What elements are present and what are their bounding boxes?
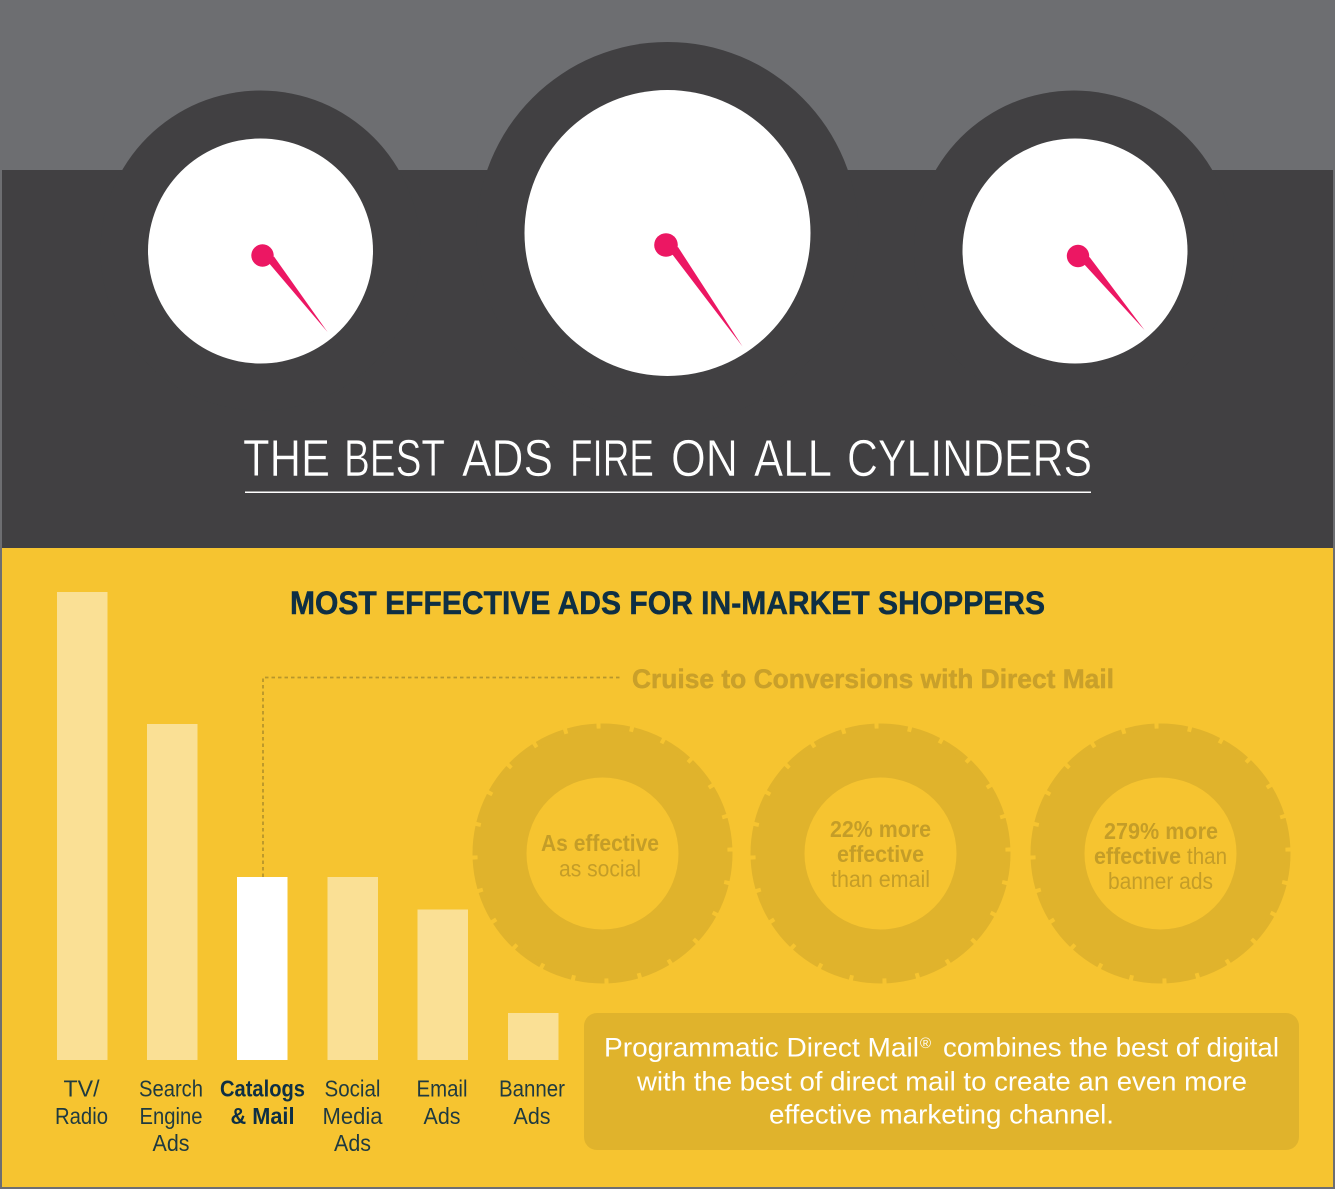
callout: with the best of direct mail to create an even more — [636, 1066, 1247, 1096]
bar: TV/Radio: TV/ — [64, 1076, 100, 1102]
icon: right gauge — [962, 138, 1188, 364]
icon: tire, 279% more effective than banner ads: 279% more — [1104, 818, 1218, 844]
bar: Social Media Ads: Ads — [334, 1130, 371, 1156]
icon: left gauge — [148, 138, 373, 364]
bar chart — [55, 592, 565, 1156]
icon: tire, 279% more effective than banner ads: banner ads — [1108, 868, 1213, 894]
bar: Banner Ads: Ads — [514, 1103, 550, 1129]
bar: Catalogs and Mail: & Mail — [230, 1103, 294, 1129]
bar: Email Ads: Ads — [424, 1103, 460, 1129]
bar: Social Media Ads: Media — [322, 1103, 383, 1129]
bar: Catalogs and Mail: Catalogs — [220, 1076, 305, 1102]
subheading: Cruise to Conversions with Direct Mail — [632, 664, 1114, 694]
icon: tire, 22% more effective than email: than email — [831, 866, 930, 892]
callout: ® — [920, 1035, 931, 1052]
bar: Search Engine Ads: Search — [139, 1076, 203, 1102]
icon: tire, as effective as social: as social — [559, 856, 641, 882]
bar: Catalogs and Mail — [220, 877, 305, 1129]
callout: combines the best of digital — [943, 1032, 1279, 1062]
title: BEST — [344, 430, 445, 488]
callout: effective marketing channel. — [769, 1100, 1114, 1130]
callout — [584, 1013, 1299, 1150]
title: ALL — [754, 430, 832, 488]
bar: Banner Ads: Banner — [499, 1076, 565, 1102]
dashed connector — [263, 678, 621, 877]
panel: dark dashboard header — [0, 0, 1335, 548]
heading: MOST EFFECTIVE ADS FOR IN-MARKET SHOPPERS — [290, 585, 1045, 621]
bar: Social Media Ads — [322, 877, 383, 1156]
callout: Programmatic Direct Mail — [604, 1032, 919, 1062]
bar: Social Media Ads: Social — [324, 1076, 380, 1102]
icon: tire, as effective as social — [476, 726, 730, 980]
icon: tire, 279% more effective than banner ads — [1034, 726, 1288, 980]
title: FIRE — [570, 430, 654, 488]
icon: center gauge — [524, 90, 810, 376]
bar: Email Ads: Email — [416, 1076, 468, 1102]
icon: tire, 22% more effective than email: effective — [837, 841, 924, 867]
title: ON — [671, 430, 738, 488]
title — [243, 430, 1092, 493]
bar: Search Engine Ads: Ads — [152, 1130, 190, 1156]
title: THE — [243, 430, 330, 488]
icon: tire, 279% more effective than banner ads: effective — [1094, 843, 1181, 869]
panel: yellow section — [0, 548, 1335, 1189]
title: CYLINDERS — [847, 430, 1092, 488]
icon: tire, as effective as social: As effective — [541, 830, 659, 856]
bar: Email Ads — [416, 910, 468, 1129]
bar: TV/Radio — [55, 592, 108, 1129]
bar: Banner Ads — [499, 1013, 565, 1129]
bar: TV/Radio: Radio — [55, 1103, 108, 1129]
icon: tire, 22% more effective than email — [754, 726, 1008, 980]
title: ADS — [462, 430, 553, 488]
bar: Search Engine Ads — [139, 724, 203, 1156]
icon: tire, 22% more effective than email: 22% more — [830, 816, 931, 842]
icon: tire, 279% more effective than banner ads: than — [1187, 843, 1227, 869]
bar: Search Engine Ads: Engine — [140, 1103, 202, 1129]
